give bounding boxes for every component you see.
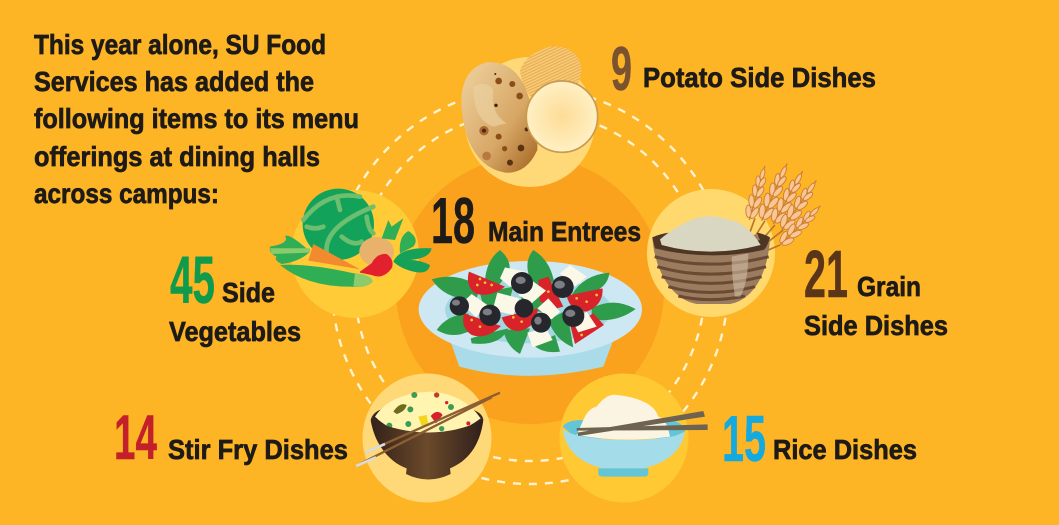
label: 9 potato side dishes: 9	[611, 34, 632, 104]
bowl	[652, 232, 770, 304]
highlight	[732, 253, 748, 297]
bowl back	[563, 420, 685, 438]
rice	[577, 395, 670, 440]
chip	[520, 46, 581, 100]
toppings	[386, 392, 470, 431]
icon: potato and chips	[461, 46, 598, 173]
tomato seeds	[470, 278, 598, 336]
label: 45 side vegetables: Vegetables	[169, 316, 301, 347]
basil leaves	[432, 250, 636, 354]
label: 14 stir fry dishes: Stir Fry Dishes	[168, 434, 348, 465]
intro text block: This year alone, SU Food	[34, 29, 326, 60]
label: 45 side vegetables: Side	[222, 277, 275, 308]
wheat stalks	[742, 160, 826, 251]
label: 14 stir fry dishes	[114, 401, 348, 473]
potato slice	[526, 81, 598, 152]
cabbage	[303, 189, 374, 260]
carrot	[308, 244, 360, 269]
intro text block: across campus:	[34, 178, 219, 209]
intro text block: Services has added the	[34, 66, 314, 97]
right greens	[393, 248, 432, 272]
plate	[450, 340, 613, 376]
intro text block	[34, 29, 359, 209]
label: 21 grain side dishes: 21	[804, 238, 848, 312]
intro text block: offerings at dining halls	[34, 141, 320, 172]
feta cubes	[462, 265, 597, 347]
intro text block: following items to its menu	[34, 103, 359, 134]
circle: stir fry	[362, 374, 492, 502]
icon: salad plate	[419, 250, 642, 376]
label: 45 side vegetables: 45	[170, 244, 215, 318]
label: 9 potato side dishes: Potato Side Dishes	[643, 62, 876, 93]
panel: central circle	[396, 156, 664, 424]
leek leaves	[270, 236, 310, 264]
radish	[360, 254, 393, 276]
label: 21 grain side dishes: Side Dishes	[804, 310, 948, 341]
icon: stir fry bowl	[356, 392, 500, 479]
label: 21 grain side dishes	[804, 238, 948, 341]
bowl rim back	[371, 408, 483, 435]
olives	[450, 272, 584, 333]
tomatoes	[463, 272, 604, 344]
icon: grain bowl	[652, 160, 826, 304]
label: 21 grain side dishes: Grain	[857, 271, 921, 302]
olive highlights	[452, 277, 575, 325]
circle: rice	[560, 374, 688, 502]
label: 18 main entrees: 18	[431, 186, 475, 258]
circle: potato	[465, 57, 595, 187]
grain	[660, 216, 761, 252]
label: 15 rice dishes	[722, 404, 917, 476]
icon: rice bowl	[563, 395, 708, 477]
cucumber	[280, 265, 373, 287]
circle: grain	[647, 189, 775, 317]
label: 15 rice dishes: Rice Dishes	[773, 434, 917, 465]
label: 18 main entrees	[431, 186, 641, 258]
label: 15 rice dishes: 15	[722, 404, 766, 476]
label: 9 potato side dishes	[611, 34, 876, 104]
chopsticks	[356, 393, 500, 466]
label: 45 side vegetables	[169, 244, 301, 347]
dashed connector rings	[332, 88, 728, 484]
bowl front	[563, 428, 685, 468]
label: 14 stir fry dishes: 14	[114, 401, 157, 473]
noodles	[375, 392, 481, 437]
bowl	[371, 420, 483, 479]
icon: vegetables	[270, 189, 432, 287]
chopsticks	[577, 411, 708, 436]
parsnip	[359, 237, 394, 266]
circle: vegetables	[291, 190, 419, 318]
label: 18 main entrees: Main Entrees	[488, 216, 641, 247]
whole potato	[461, 62, 537, 173]
